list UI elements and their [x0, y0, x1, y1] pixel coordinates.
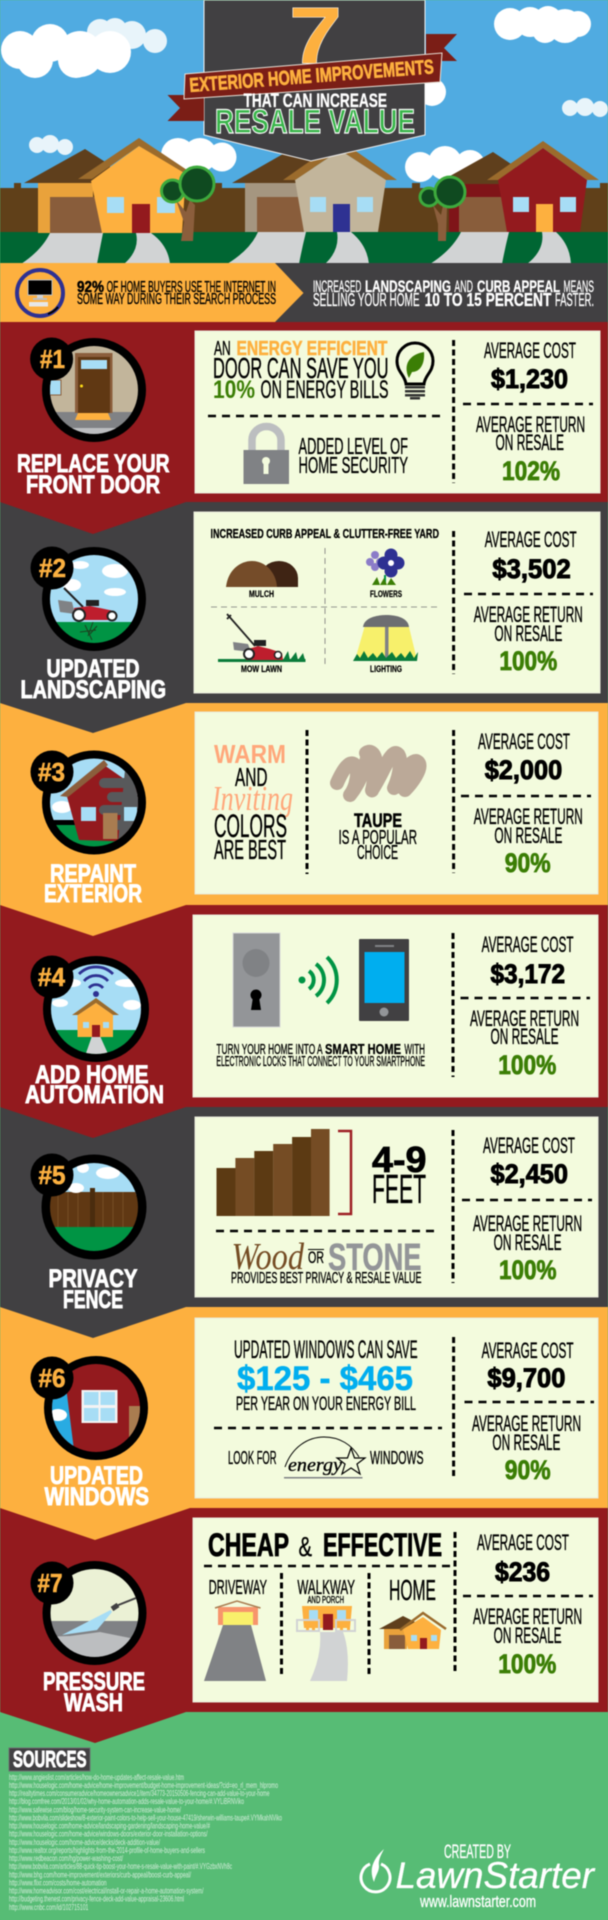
section title: WINDOWS: [44, 1483, 149, 1511]
text: wood or stone: Wood: [232, 1236, 305, 1278]
icon: fence height: [216, 1129, 351, 1216]
icon: lighting: LIGHTING: [370, 664, 402, 674]
sources list: http://www.flixr.com/costs/home-automation: [9, 1878, 107, 1888]
section title: [44, 860, 142, 908]
heading: cheap and effective: EFFECTIVE: [323, 1527, 442, 1563]
title banner: [168, 0, 457, 161]
icon: electronic lock: [233, 933, 280, 1027]
text: warm and inviting colors: ARE BEST: [214, 834, 286, 865]
text: landscaping: SELLING YOUR HOME: [313, 290, 420, 310]
text: home security: ADDED LEVEL OF: [298, 433, 408, 459]
sources list: http://www.realtor.org/reports/highlights-from-the-2014-profile-of-home-buyers-and-sellers: [9, 1845, 205, 1855]
sources list: http://www.houselogic.com/home-advice/decks/deck-addition-value/: [9, 1837, 160, 1847]
heading: cheap and effective: [208, 1527, 442, 1563]
section title: UPDATED: [46, 655, 140, 683]
taupe swatch: [337, 752, 419, 795]
driveway: DRIVEWAY: [209, 1577, 267, 1599]
text: energy efficient door: AN: [214, 338, 231, 360]
average cost: [485, 527, 577, 584]
text: energy efficient door: 10%: [213, 376, 255, 404]
sources list: http://www.homeadvisor.com/cost/electrical/install-or-repair-a-home-automation-system/: [9, 1886, 204, 1896]
section 6: updated windows: [30, 1318, 598, 1511]
stat band: [0, 263, 608, 322]
icon: smartphone: [359, 939, 409, 1021]
text: window savings: $125 - $465: [237, 1360, 413, 1398]
icon: mulch: MULCH: [249, 589, 274, 599]
sources list: http://www.houselogic.com/home-advice/windows-doors/exterior-door-installation-options/: [9, 1828, 208, 1838]
panel 6: [195, 1318, 598, 1498]
text: home security: HOME SECURITY: [298, 452, 408, 478]
house: orange: [24, 138, 190, 233]
sources: [9, 1746, 282, 1912]
section title: EXTERIOR: [44, 880, 142, 908]
text: 92 percent: SOME WAY DURING THEIR SEARCH PROCESS: [77, 291, 276, 308]
section 4: add home automation: [25, 915, 598, 1109]
text: energy efficient door: DOOR CAN SAVE YOU: [213, 353, 388, 385]
average return: 90%: [505, 1455, 551, 1485]
panel 3: [195, 712, 598, 894]
section title: REPAINT: [50, 860, 136, 888]
house: beige: [232, 140, 397, 232]
icon: flowers: FLOWERS: [370, 589, 402, 599]
walkway and porch: [297, 1577, 355, 1681]
section title: PRIVACY: [48, 1265, 138, 1293]
icon: fence scene: [40, 1154, 150, 1260]
icon: wireless signal: [298, 957, 337, 1003]
trees: [162, 167, 465, 241]
section title: PRESSURE: [43, 1668, 145, 1696]
text: landscaping: CURB APPEAL: [477, 277, 560, 296]
badge 2: #2: [39, 553, 66, 583]
text: energy efficient door: [213, 338, 388, 404]
text: wood or stone: PROVIDES BEST PRIVACY & RESALE VALUE: [231, 1270, 422, 1287]
ribbon tails: [168, 34, 457, 121]
walkway and porch: WALKWAY: [297, 1577, 355, 1599]
badge 1: [30, 338, 73, 380]
ribbon with heading: EXTERIOR HOME IMPROVEMENTS: [189, 56, 435, 97]
text: 4-9 feet: [372, 1139, 426, 1212]
average return: 100%: [498, 1649, 556, 1679]
text: taupe: TAUPE: [354, 811, 402, 832]
badge 5: [30, 1154, 74, 1196]
average cost: $3,172: [490, 959, 565, 989]
badge 7: #7: [38, 1568, 62, 1598]
average return: [474, 602, 583, 676]
text: smart home: WITH: [404, 1041, 425, 1058]
average return: [473, 1211, 582, 1285]
panel 1: [195, 331, 600, 493]
section title: WASH: [64, 1689, 123, 1717]
average cost: $3,502: [492, 554, 571, 584]
text: landscaping: AND: [454, 277, 473, 296]
icon: padlock: [244, 427, 289, 484]
section 7: pressure wash: [30, 1518, 598, 1717]
section title: AUTOMATION: [25, 1081, 164, 1109]
average cost: [478, 729, 570, 785]
text: warm and inviting colors: COLORS: [214, 808, 287, 844]
section 3: repaint exterior: [30, 712, 598, 908]
text: landscaping: 10 TO 15 PERCENT: [425, 290, 551, 310]
icon: energy star logo: energy: [288, 1455, 343, 1476]
heading: INCREASED CURB APPEAL & CLUTTER-FREE YARD: [210, 526, 439, 541]
sources heading: SOURCES: [13, 1746, 86, 1772]
created by LawnStarter: www.lawnstarter.com: [419, 1892, 536, 1911]
grass: [0, 232, 608, 264]
text: energy efficient door: ENERGY EFFICIENT: [236, 338, 388, 360]
badge 2: [30, 546, 74, 590]
clouds: [1, 6, 608, 182]
average return: [472, 1411, 581, 1485]
badge 7: [30, 1562, 74, 1604]
panel 5: [195, 1117, 598, 1297]
heading: cheap and effective: &: [298, 1531, 312, 1562]
section title: [17, 450, 170, 499]
section title: UPDATED: [50, 1462, 143, 1490]
icon: light bulb: [397, 343, 433, 400]
text: taupe: CHOICE: [357, 842, 398, 864]
average return: [476, 412, 585, 486]
text: energy efficient door: ON ENERGY BILLS: [260, 376, 388, 404]
average return: [473, 1604, 582, 1679]
sources list: http://www.cnbc.com/id/102715101: [9, 1902, 89, 1912]
icon: mulch: [226, 561, 298, 599]
sources list: http://blog.comfree.com/2013/01/02/why-home-automation-adds-resale-value-to-your-home/#.VYLiBRNViko: [9, 1796, 244, 1806]
average cost: [483, 1133, 575, 1189]
section title: ADD HOME: [35, 1061, 148, 1089]
average cost: $1,230: [491, 364, 568, 394]
icon: mow lawn: [218, 614, 306, 674]
text: 4-9 feet: 4-9: [372, 1139, 426, 1180]
section title: LANDSCAPING: [20, 676, 166, 704]
icon: mow lawn: MOW LAWN: [241, 664, 282, 674]
text: 92 percent: [77, 279, 276, 308]
badge 1: #1: [40, 344, 65, 374]
icon: window on house: [40, 1355, 152, 1461]
average cost: $2,000: [485, 755, 562, 785]
text: warm and inviting colors: Inviting: [211, 779, 293, 818]
section 1: replace your front door: [17, 331, 600, 499]
section title: FENCE: [63, 1286, 123, 1314]
header scene: sky and neighbourhood: [0, 0, 608, 264]
text: landscaping: LANDSCAPING: [365, 277, 451, 296]
text: window savings: PER YEAR ON YOUR ENERGY BILL: [236, 1394, 416, 1415]
house: red: [449, 141, 599, 232]
text: warm and inviting colors: AND: [235, 762, 268, 792]
average return: 100%: [499, 646, 557, 676]
sources list: http://www.bobvila.com/slideshow/8-exterior-paint-colors-to-help-sell-your-house-47419/sherwin-williams-taupe#.VYMkahNViko: [9, 1812, 282, 1822]
text: window savings: [234, 1336, 418, 1415]
average cost: $236: [495, 1557, 550, 1587]
icon: energy star logo: [284, 1437, 365, 1478]
badge 6: #6: [38, 1363, 66, 1393]
driveway: [204, 1577, 267, 1681]
icon: lawn mower scene: [40, 547, 150, 652]
text: 92 percent: OF HOME BUYERS USE THE INTERNET IN: [107, 279, 276, 296]
driveways and walkways: [21, 232, 571, 264]
text: windows: WINDOWS: [370, 1448, 424, 1468]
text: smart home: [216, 1041, 425, 1070]
average return: [470, 1006, 579, 1080]
icon: LawnStarter logo: [361, 1849, 390, 1892]
average cost: $2,450: [490, 1159, 568, 1189]
walkway and porch: AND PORCH: [308, 1595, 344, 1606]
created by LawnStarter: CREATED BY: [444, 1842, 511, 1863]
fence: [0, 183, 608, 233]
badge 3: #3: [38, 757, 65, 787]
created by LawnStarter: LawnStarter: [396, 1855, 596, 1896]
text: taupe: [338, 811, 417, 864]
sources list: http://www.angieslist.com/articles/how-do-home-updates-affect-resale-value.htm: [9, 1772, 184, 1782]
text: landscaping: INCREASED: [313, 277, 361, 296]
average cost: $9,700: [487, 1363, 565, 1393]
text: warm and inviting colors: WARM: [214, 739, 286, 769]
icon: repainting house: [40, 750, 150, 855]
icon: flowers: [366, 548, 404, 599]
section title: [48, 1265, 138, 1314]
icon: front door: [40, 338, 150, 442]
section 2: updated landscaping: [20, 512, 600, 704]
created by LawnStarter: [361, 1842, 596, 1911]
text: smart home: SMART HOME: [325, 1041, 401, 1058]
section 5: privacy fence: [30, 1117, 598, 1314]
heading: cheap and effective: CHEAP: [208, 1527, 289, 1563]
text: 4-9 feet: FEET: [372, 1166, 426, 1212]
text: look for: LOOK FOR: [228, 1448, 276, 1468]
panel 4: [193, 915, 598, 1097]
panel 2: [194, 512, 600, 693]
home: [379, 1575, 446, 1649]
subheading: THAT CAN INCREASE: [244, 91, 387, 112]
panel 6: UPDATED WINDOWS CAN SAVE: [234, 1336, 418, 1364]
icon: computer: [17, 270, 63, 316]
average cost: [482, 932, 574, 989]
text: wood or stone: STONE: [328, 1237, 422, 1279]
sources list: http://budgeting.thenest.com/privacy-fence-deck-add-value-appraisal-23606.html: [9, 1894, 184, 1904]
text: wood or stone: OR: [308, 1248, 324, 1267]
badge 5: #5: [38, 1160, 66, 1190]
text: smart home: TURN YOUR HOME INTO A: [216, 1041, 323, 1058]
average cost: [482, 1338, 574, 1393]
sources list: http://www.bhg.com/home-improvement/exteriors/curb-appeal/boost-curb-appeal/: [9, 1870, 191, 1880]
section title: [44, 1462, 149, 1511]
average return: 100%: [499, 1255, 556, 1285]
sources list: http://realtytimes.com/consumeradvice/homeownersadvice1/item/34773-20150506-fencing-can-add-value-to-your-home: [9, 1788, 270, 1798]
ribbon with heading: [184, 53, 442, 99]
section title: REPLACE YOUR: [17, 450, 170, 478]
section title: FRONT DOOR: [26, 471, 160, 499]
sources list: http://www.redbeacon.com/hg/power-washing-cost/: [9, 1853, 123, 1863]
icon: lighting: [353, 615, 418, 674]
sources list: http://www.houselogic.com/home-advice/home-improvement/budget-home-improvement-ideas/?cid=eo_rl_mem_hlpromo: [9, 1780, 278, 1790]
text: 92 percent: 92%: [77, 279, 104, 296]
sources list: http://www.bobvila.com/articles/88-quick-tip-boost-your-home-s-resale-value-with-paint/#.VYGzbxNVh8c: [9, 1861, 232, 1871]
average return: 100%: [498, 1050, 556, 1080]
sources heading: [9, 1746, 90, 1772]
average return: [474, 804, 583, 878]
badge 4: [30, 956, 74, 998]
average return: 90%: [505, 848, 551, 878]
average cost: [477, 1530, 569, 1587]
heading: resale value: RESALE VALUE: [215, 103, 415, 141]
text: warm and inviting colors: [211, 739, 293, 865]
badge 4: #4: [38, 962, 66, 992]
section title: [43, 1668, 145, 1717]
home: HOME: [389, 1575, 436, 1607]
badge 6: [30, 1356, 74, 1400]
section title: [20, 655, 166, 704]
icon: pressure washer: [40, 1560, 150, 1666]
sources list: [9, 1772, 282, 1912]
section title: [25, 1061, 164, 1109]
text: home security: [298, 433, 408, 478]
sources list: http://www.safewise.com/blog/home-security-system-can-increase-value-home/: [9, 1804, 181, 1814]
text: landscaping: [313, 277, 594, 310]
badge 3: [30, 750, 74, 794]
text: wood or stone: [231, 1236, 422, 1287]
average cost: [484, 338, 576, 394]
panel 7: [193, 1518, 598, 1702]
text: taupe: IS A POPULAR: [338, 827, 417, 849]
sources list: http://www.houselogic.com/home-advice/landscaping-gardening/landscaping-home-value/#: [9, 1820, 210, 1830]
icon: connected house: [40, 955, 152, 1062]
average return: 102%: [502, 456, 560, 486]
